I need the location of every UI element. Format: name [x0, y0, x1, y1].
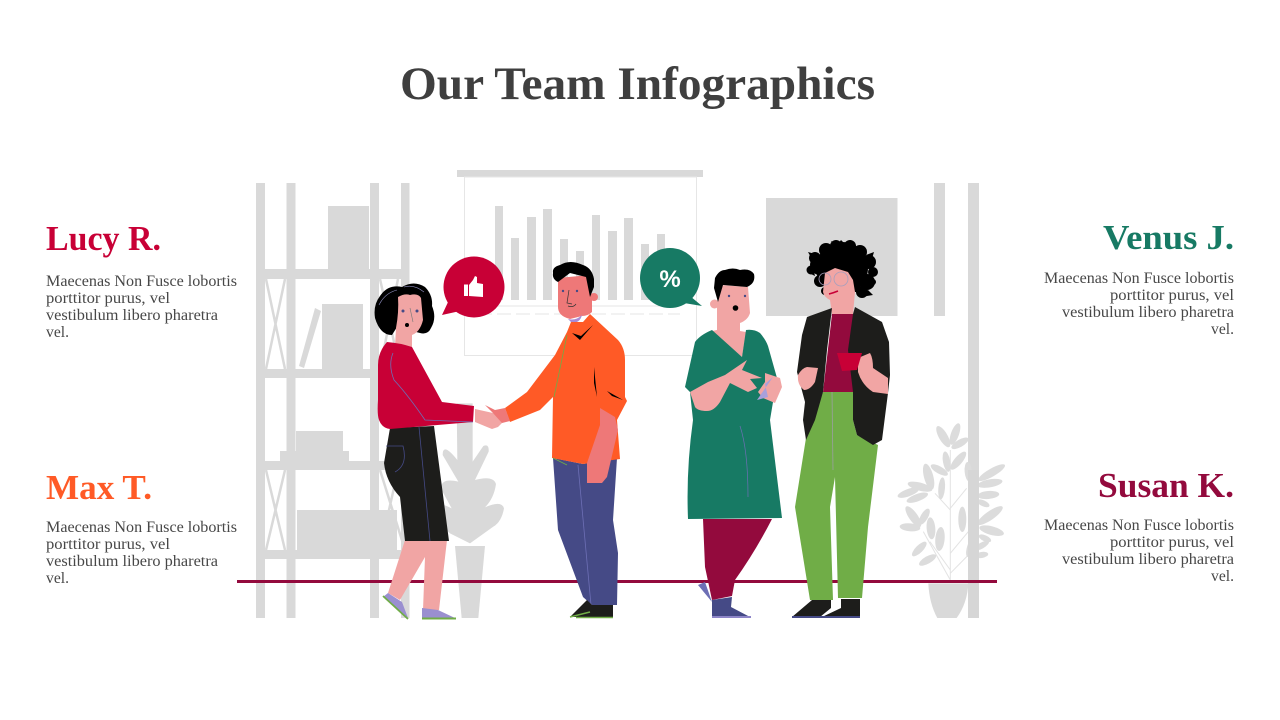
speech bubble: percent	[640, 248, 702, 308]
title: Our Team Infographics	[400, 58, 875, 110]
inner top	[823, 314, 853, 392]
Max description: Maecenas Non Fusce lobortis	[46, 519, 237, 536]
man forearm and hand	[587, 408, 618, 483]
woman shoes	[698, 582, 751, 618]
wall frame	[766, 198, 898, 316]
man hair	[553, 262, 594, 297]
person: Lucy handshake	[375, 284, 503, 620]
woman face features	[728, 295, 746, 311]
man trousers	[553, 458, 618, 605]
Susan description: Maecenas Non Fusce lobortis	[1044, 517, 1234, 534]
man shirt	[505, 314, 627, 464]
shirt folds	[572, 325, 623, 400]
profile: Venus J.	[1044, 218, 1238, 338]
man neck and head	[558, 275, 592, 319]
cup	[837, 353, 862, 371]
Lucy description: porttitor purus, vel	[46, 290, 170, 307]
green trousers	[795, 392, 878, 600]
woman arms and hands	[690, 360, 762, 411]
Venus description: porttitor purus, vel	[1110, 287, 1234, 304]
Venus description: vel.	[1211, 321, 1234, 338]
floor line	[237, 580, 997, 583]
Max description: porttitor purus, vel	[46, 536, 170, 553]
Susan description: vestibulum libero pharetra	[1062, 551, 1234, 568]
Lucy description: vel.	[46, 324, 69, 341]
profile: Max T.	[46, 468, 241, 587]
Lucy hair	[375, 284, 434, 335]
glasses and features	[819, 272, 848, 294]
profile: Lucy R.: Lucy R.	[46, 219, 161, 258]
Lucy description: Maecenas Non Fusce lobortis	[46, 273, 237, 290]
man face features	[562, 290, 578, 307]
Lucy neck and face	[395, 294, 423, 347]
speech bubble: thumbs up	[442, 256, 504, 318]
profile: Lucy R.	[46, 219, 241, 341]
Venus description: Maecenas Non Fusce lobortis	[1044, 270, 1234, 287]
window posts	[934, 183, 979, 618]
Venus description: vestibulum libero pharetra	[1062, 304, 1234, 321]
Lucy sweater	[378, 342, 474, 429]
green dress	[685, 330, 782, 519]
bookshelf	[256, 183, 410, 618]
Lucy description: vestibulum libero pharetra	[46, 307, 218, 324]
Max description: vel.	[46, 570, 69, 587]
Lucy facial features	[379, 286, 424, 327]
curly hair	[806, 240, 878, 298]
icon: percent: %	[659, 266, 681, 293]
Lucy shoes	[383, 593, 456, 620]
profile: Susan K.	[1044, 466, 1238, 585]
jacket	[797, 308, 832, 440]
icon: thumbs up	[464, 276, 483, 297]
presentation board	[457, 170, 703, 356]
background illustration	[256, 170, 1007, 618]
woman hair	[714, 268, 754, 302]
right potted plant	[896, 422, 1007, 618]
man shoes	[570, 600, 613, 617]
Susan description: vel.	[1211, 568, 1234, 585]
person: man in orange shirt	[485, 262, 627, 618]
Lucy skirt	[384, 426, 449, 541]
shoes	[792, 599, 860, 618]
profile: Max T.: Max T.	[46, 468, 152, 507]
face	[823, 268, 855, 314]
woman head and neck	[712, 285, 750, 357]
profile: Venus J.: Venus J.	[1103, 218, 1234, 257]
person: woman with curly hair	[792, 240, 890, 618]
left potted plant	[433, 403, 504, 618]
Max description: vestibulum libero pharetra	[46, 553, 218, 570]
person: woman in green dress	[685, 268, 782, 618]
Susan description: porttitor purus, vel	[1110, 534, 1234, 551]
woman legs	[703, 519, 772, 600]
hands	[798, 367, 818, 390]
Lucy legs	[388, 540, 447, 610]
Lucy hand	[475, 409, 503, 429]
profile: Susan K.: Susan K.	[1098, 466, 1234, 505]
